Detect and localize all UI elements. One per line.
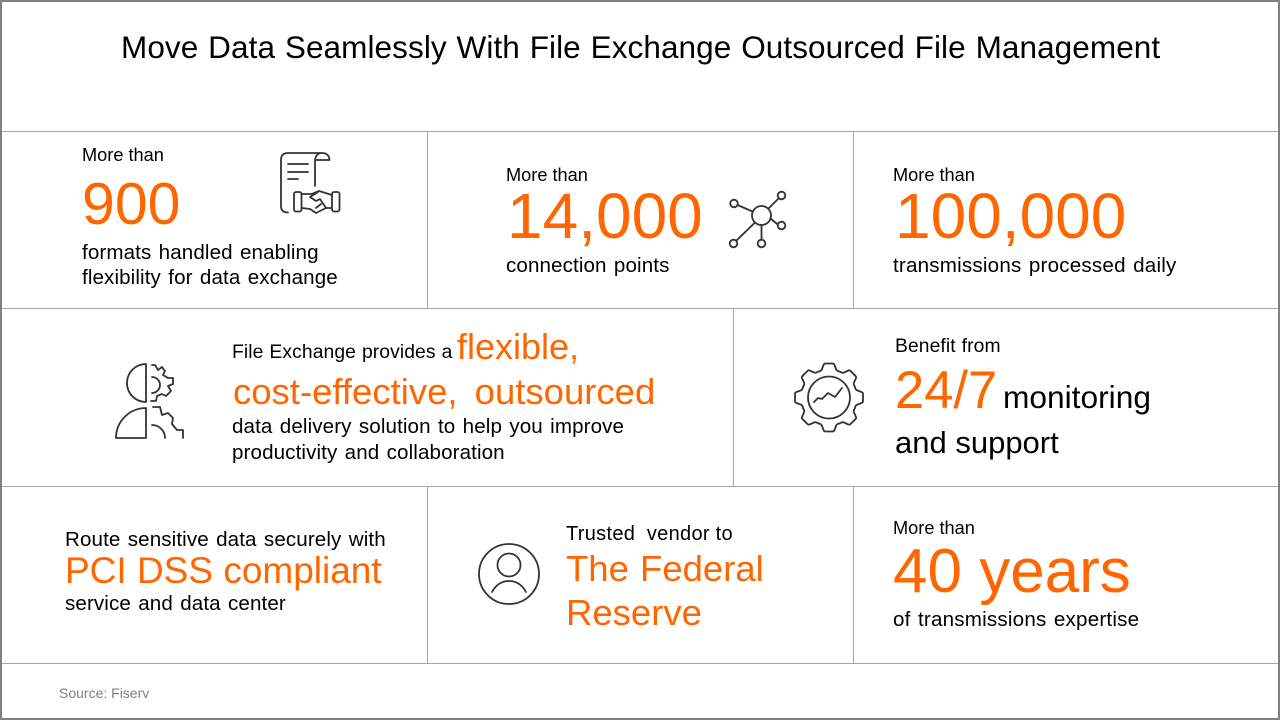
text: transmissions processed daily: transmissions processed daily [893, 254, 1176, 277]
text: trusted vendor: Trusted vendor to [566, 522, 733, 544]
text: formats description: flexibility for data exchange [82, 266, 338, 289]
stat: 100,000: 100,000 [895, 180, 1126, 252]
highlight: The Federal Reserve: The Federal [566, 548, 764, 589]
panel: flexible cost-effective solution [115, 326, 655, 464]
panel: 14,000 connection points [506, 165, 786, 277]
stat: 40 years: 40 years [893, 537, 1131, 606]
panel: trusted vendor [478, 522, 764, 633]
panel: 40 years [893, 518, 1139, 630]
highlight: flexible: flexible, [457, 326, 579, 367]
text: route sensitive data: Route sensitive data securely with [65, 528, 386, 551]
icon: gear with chart [794, 362, 864, 432]
text: solution description: data delivery solution to help you improve [232, 414, 624, 438]
text: more than: More than [82, 145, 164, 165]
panel: 100,000 transmissions [893, 165, 1176, 277]
text: more than: More than [506, 165, 588, 185]
icon: head and gears [115, 363, 184, 439]
text: formats description: formats handled enabling [82, 240, 319, 264]
text: and support: and support [895, 425, 1059, 460]
highlight: The Federal Reserve [566, 548, 764, 633]
text: service and data center: service and data center [65, 592, 286, 615]
text: connection points: connection points [506, 254, 670, 277]
icon: person in circle [478, 543, 540, 605]
panel: 900 formats [82, 145, 340, 289]
stat: 24/7 monitoring: 24/7 monitoring [895, 361, 1151, 420]
source note: Source: Fiserv [59, 685, 149, 701]
panel: 24/7 monitoring [794, 336, 1151, 460]
text: more than: More than [893, 165, 975, 185]
panel: PCI DSS compliant [65, 528, 386, 615]
text: more than: More than [893, 518, 975, 538]
highlight: PCI DSS compliant: PCI DSS compliant [65, 550, 382, 591]
text: transmissions expertise: of transmissions expertise [893, 608, 1139, 630]
icon: contract and handshake [280, 152, 340, 214]
text: benefit from: Benefit from [895, 336, 1001, 357]
title: Move Data Seamlessly With File Exchange Outsourced File Management [121, 29, 1160, 65]
stat: 14,000: 14,000 [507, 180, 703, 252]
highlight: cost-effective outsourced: cost-effective, outsourced [233, 371, 655, 412]
stat: 900: 900 [82, 171, 180, 237]
text: solution description: productivity and collaboration [232, 440, 505, 464]
text: solution description [232, 414, 624, 464]
text: solution statement: File Exchange provides a [232, 342, 452, 363]
icon: network nodes [728, 190, 786, 248]
highlight: The Federal Reserve: Reserve [566, 592, 702, 633]
text: formats description [82, 240, 338, 289]
